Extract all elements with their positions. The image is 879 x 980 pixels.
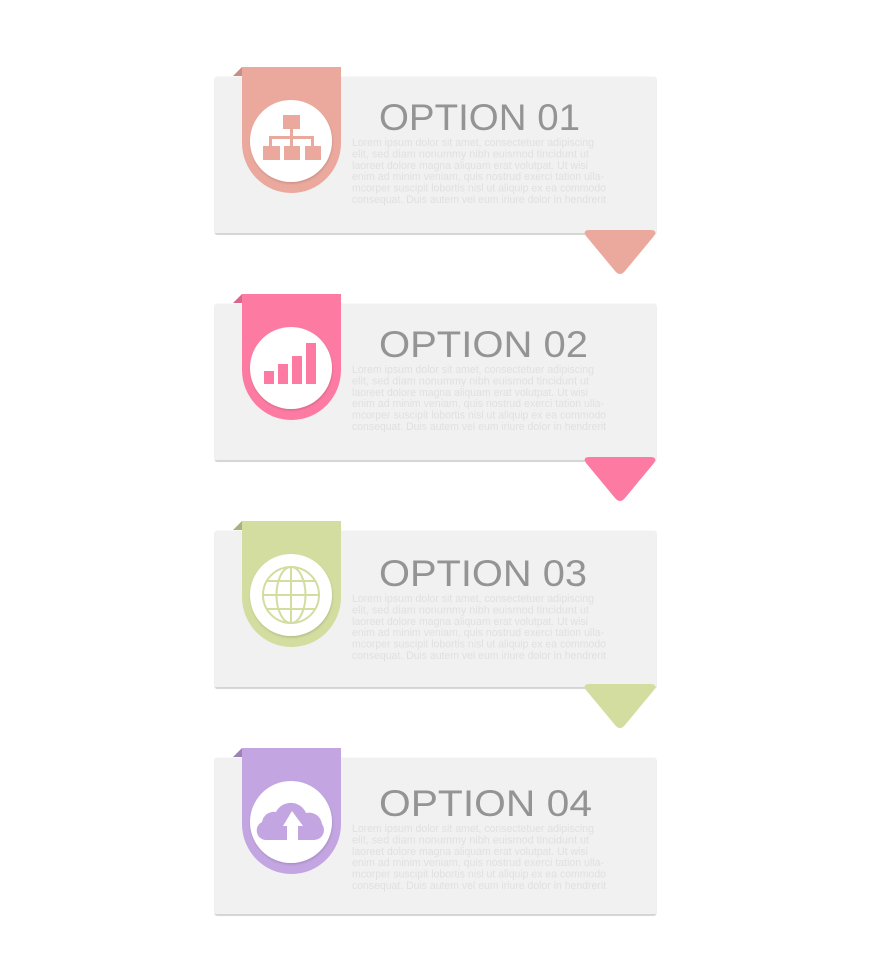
ribbon fold — [233, 748, 242, 757]
body text: enim ad minim veniam, quis nostrud exerci tation ulla- — [352, 857, 604, 869]
icon circle — [250, 781, 332, 863]
heading: OPTION 01 — [379, 97, 580, 138]
panel: option 01 — [215, 67, 656, 274]
corner triangle — [585, 684, 655, 728]
ribbon — [242, 748, 341, 874]
body text: consequat. Duis autem vel eum iriure dolor in hendrerit — [352, 194, 606, 206]
icon circle — [250, 100, 332, 182]
body text — [352, 364, 606, 433]
icon: bar chart — [264, 343, 316, 384]
body text — [352, 137, 606, 206]
ribbon — [242, 67, 341, 193]
icon circle — [250, 554, 332, 636]
body text: mcorper suscipit lobortis nisl ut aliquip ex ea commodo — [352, 182, 606, 194]
panel: option 02 — [215, 294, 656, 501]
icon: globe — [263, 567, 319, 623]
body text: laoreet dolore magna aliquam erat volutpat. Ut wisi — [352, 160, 588, 172]
body text — [352, 823, 606, 892]
body text: consequat. Duis autem vel eum iriure dolor in hendrerit — [352, 421, 606, 433]
body text: mcorper suscipit lobortis nisl ut aliquip ex ea commodo — [352, 868, 606, 880]
icon: hierarchy — [263, 115, 321, 160]
body text: enim ad minim veniam, quis nostrud exerci tation ulla- — [352, 627, 604, 639]
body text: enim ad minim veniam, quis nostrud exerci tation ulla- — [352, 171, 604, 183]
panel: option 04 — [215, 748, 656, 914]
body text: laoreet dolore magna aliquam erat volutpat. Ut wisi — [352, 387, 588, 399]
heading: OPTION 04 — [379, 783, 592, 824]
corner triangle — [585, 457, 655, 501]
card background — [215, 76, 656, 234]
body text: Lorem ipsum dolor sit amet, consectetuer adipiscing — [352, 823, 594, 835]
body text: Lorem ipsum dolor sit amet, consectetuer adipiscing — [352, 593, 594, 605]
heading: OPTION 03 — [379, 553, 587, 594]
card background — [215, 758, 656, 914]
body text: consequat. Duis autem vel eum iriure dolor in hendrerit — [352, 880, 606, 892]
card background — [215, 304, 656, 460]
corner triangle — [585, 230, 655, 274]
body text — [352, 593, 606, 662]
body text: consequat. Duis autem vel eum iriure dolor in hendrerit — [352, 650, 606, 662]
body text: mcorper suscipit lobortis nisl ut aliquip ex ea commodo — [352, 638, 606, 650]
body text: elit, sed diam nonummy nibh euismod tincidunt ut — [352, 376, 589, 388]
body text: elit, sed diam nonummy nibh euismod tincidunt ut — [352, 148, 589, 160]
card background — [215, 530, 656, 688]
ribbon — [242, 294, 341, 420]
ribbon fold — [233, 521, 242, 530]
heading: OPTION 02 — [379, 324, 588, 365]
icon circle — [250, 327, 332, 409]
body text: elit, sed diam nonummy nibh euismod tincidunt ut — [352, 604, 589, 616]
icon: cloud upload — [257, 803, 324, 842]
body text: mcorper suscipit lobortis nisl ut aliquip ex ea commodo — [352, 410, 606, 422]
body text: Lorem ipsum dolor sit amet, consectetuer adipiscing — [352, 364, 594, 376]
body text: elit, sed diam nonummy nibh euismod tincidunt ut — [352, 834, 589, 846]
panel: option 03 — [215, 521, 656, 728]
ribbon — [242, 521, 341, 647]
body text: Lorem ipsum dolor sit amet, consectetuer adipiscing — [352, 137, 594, 149]
ribbon fold — [233, 67, 242, 76]
body text: enim ad minim veniam, quis nostrud exerci tation ulla- — [352, 398, 604, 410]
body text: laoreet dolore magna aliquam erat volutpat. Ut wisi — [352, 616, 588, 628]
body text: laoreet dolore magna aliquam erat volutpat. Ut wisi — [352, 846, 588, 858]
ribbon fold — [233, 294, 242, 303]
